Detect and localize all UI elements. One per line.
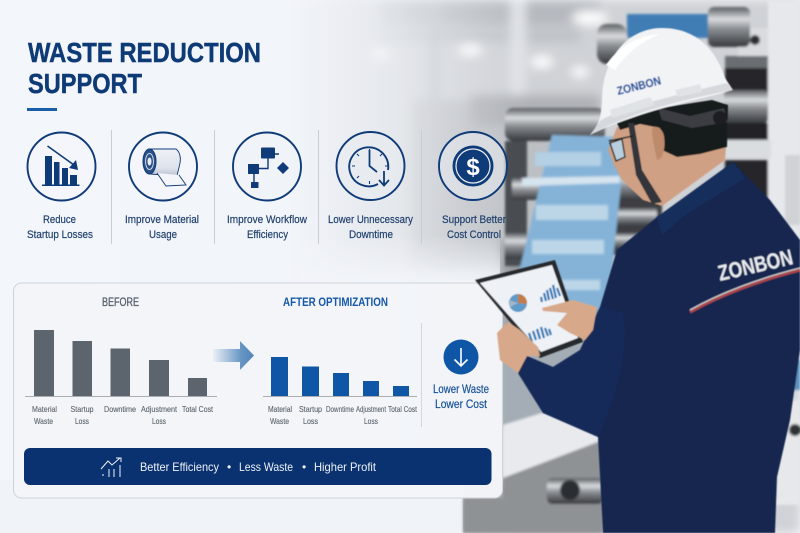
printing machine	[463, 0, 800, 533]
banner: better efficiency less waste higher profit	[24, 448, 492, 485]
benefit: reduce startup losses: Reduce	[43, 214, 76, 226]
after bar chart: Material	[268, 404, 292, 414]
factory background photo	[240, 0, 800, 533]
benefit: lower unnecessary downtime: Downtime	[349, 229, 393, 241]
benefit: improve workflow efficiency: Improve Workflow	[227, 214, 307, 226]
after bar chart: Total Cost	[388, 404, 417, 414]
jacket	[518, 162, 800, 533]
banner: better efficiency less waste higher profit: Higher Profit	[314, 460, 377, 474]
helmet logo: ZONBON	[616, 75, 662, 98]
before bar chart: Waste	[34, 416, 53, 426]
benefit dividers	[112, 130, 422, 244]
after bar chart: Waste	[270, 416, 289, 426]
benefit: lower unnecessary downtime	[328, 132, 413, 241]
benefit: improve workflow efficiency: Efficiency	[247, 229, 288, 241]
callout: lower waste lower cost: Lower Waste	[433, 382, 489, 396]
before heading: BEFORE	[102, 295, 139, 309]
before bar chart	[25, 330, 217, 426]
title: WASTE REDUCTION	[28, 37, 261, 68]
title	[28, 37, 261, 99]
benefit: support better cost control: $	[466, 154, 480, 181]
benefit: improve workflow efficiency	[227, 132, 307, 241]
benefit: improve material usage	[125, 132, 199, 241]
benefit: support better cost control: Cost Control	[447, 229, 501, 241]
before bar chart: Adjustment	[141, 404, 178, 414]
before bar chart: Material	[32, 404, 57, 414]
callout: lower waste lower cost	[433, 340, 489, 411]
after bar chart: Downtime	[326, 404, 354, 414]
helmet	[590, 28, 733, 135]
benefit: improve material usage: Usage	[149, 229, 177, 241]
after heading: AFTER OPTIMIZATION	[283, 295, 388, 309]
after bar chart: Adjustment	[356, 404, 386, 414]
fade above comparison panel	[300, 235, 500, 283]
before bar chart: Loss	[152, 416, 166, 426]
after bar chart: Startup	[299, 404, 322, 414]
tablet	[475, 260, 583, 358]
hands	[497, 300, 597, 373]
callout: lower waste lower cost: Lower Cost	[435, 397, 488, 411]
benefit: support better cost control	[439, 132, 507, 241]
banner: better efficiency less waste higher profit: Less Waste	[239, 460, 293, 474]
before bar chart: Loss	[75, 416, 89, 426]
benefit: reduce startup losses: Startup Losses	[27, 229, 93, 241]
before bar chart: Startup	[70, 404, 94, 414]
title: SUPPORT	[28, 68, 142, 99]
before bar chart: Downtime	[104, 404, 136, 414]
title accent	[27, 108, 57, 111]
benefit: improve material usage: Improve Material	[125, 214, 199, 226]
after bar chart: Loss	[364, 416, 378, 426]
after bar chart	[263, 357, 417, 426]
banner: better efficiency less waste higher profit: •	[302, 460, 306, 474]
benefit: support better cost control: Support Better	[442, 214, 506, 226]
benefit: reduce startup losses	[27, 132, 96, 241]
before bar chart: Total Cost	[182, 404, 214, 414]
benefit: lower unnecessary downtime: Lower Unnecessary	[328, 214, 413, 226]
worker	[475, 28, 800, 533]
banner: better efficiency less waste higher profit: •	[227, 460, 231, 474]
fade below comparison panel	[0, 480, 463, 533]
arrow: before to after	[213, 341, 254, 370]
after bar chart: Loss	[303, 416, 318, 426]
banner: better efficiency less waste higher profit: Better Efficiency	[140, 460, 219, 474]
panel: before and after comparison	[14, 283, 502, 498]
